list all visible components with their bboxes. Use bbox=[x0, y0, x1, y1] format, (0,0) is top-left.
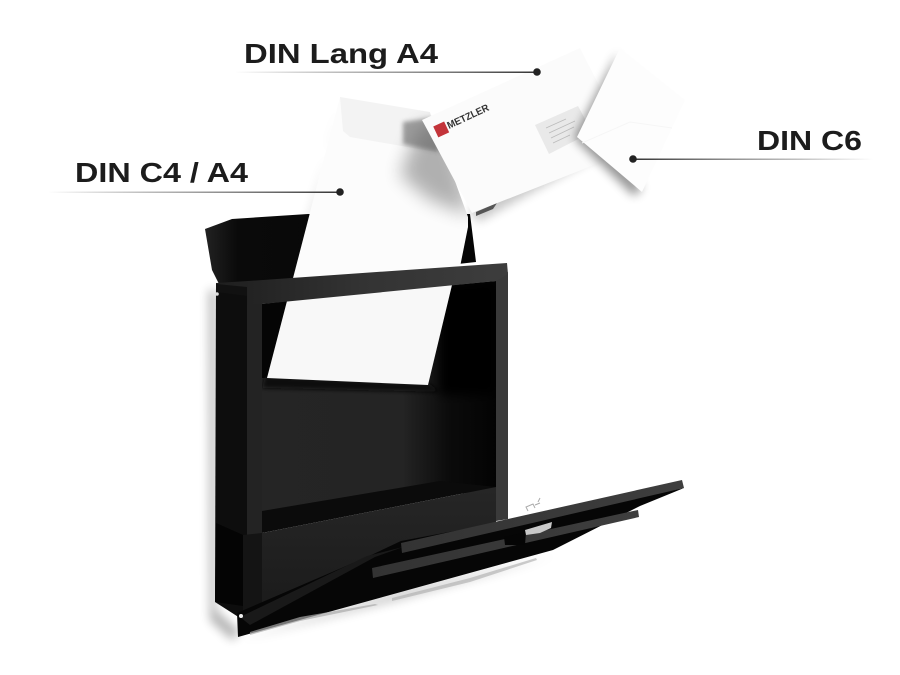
key in lock bbox=[526, 498, 540, 511]
callout: DIN Lang A4: DIN Lang A4 bbox=[244, 38, 438, 69]
lower left notch bbox=[215, 523, 243, 606]
mailbox drop shadow bbox=[209, 290, 560, 640]
callout: DIN C4 / A4: DIN C4 / A4 bbox=[75, 157, 248, 188]
logo: Metzler bbox=[433, 102, 492, 137]
left inner strip bbox=[247, 286, 262, 612]
upper plate bbox=[401, 480, 684, 553]
address window bbox=[535, 106, 592, 154]
open door bbox=[237, 480, 684, 637]
interior back wall bbox=[262, 281, 496, 515]
left side dark bbox=[215, 284, 247, 618]
hinge screw bbox=[215, 292, 219, 296]
mailbox body bbox=[215, 263, 508, 618]
lower front panel bbox=[262, 487, 496, 608]
envelope: DIN C4 / A4 lower part bbox=[267, 285, 452, 385]
silver handle bbox=[525, 522, 552, 535]
logo: Metzler: METZLER bbox=[446, 102, 492, 132]
handle slot bbox=[504, 532, 526, 545]
shadow cast by the Lang envelope bbox=[400, 118, 470, 215]
silver lower edge bbox=[250, 604, 378, 635]
shadow under C6 envelope bbox=[574, 52, 642, 196]
callout: DIN C6: DIN C6 bbox=[757, 125, 862, 156]
right pillar bbox=[496, 272, 508, 521]
envelope flap bbox=[340, 97, 436, 152]
callout: DIN C4 / A4 bbox=[48, 157, 344, 196]
envelope: DIN C6 bbox=[577, 48, 685, 192]
shelf top bbox=[262, 481, 496, 533]
envelope: DIN Lang bbox=[422, 48, 632, 213]
interior upper shadow bbox=[262, 301, 288, 378]
door black underside bbox=[237, 488, 684, 637]
envelope: DIN C4 / A4 upper part bbox=[292, 97, 470, 282]
callout: DIN C6 bbox=[629, 125, 873, 163]
lower plate bbox=[372, 510, 639, 578]
envelope soft halo bbox=[292, 100, 338, 282]
callout: DIN Lang A4 bbox=[235, 38, 541, 76]
top bar bbox=[216, 263, 508, 305]
hinge screw bbox=[239, 614, 243, 618]
shadow under Lang envelope bbox=[470, 90, 600, 222]
mailbox back flap bbox=[205, 214, 476, 290]
